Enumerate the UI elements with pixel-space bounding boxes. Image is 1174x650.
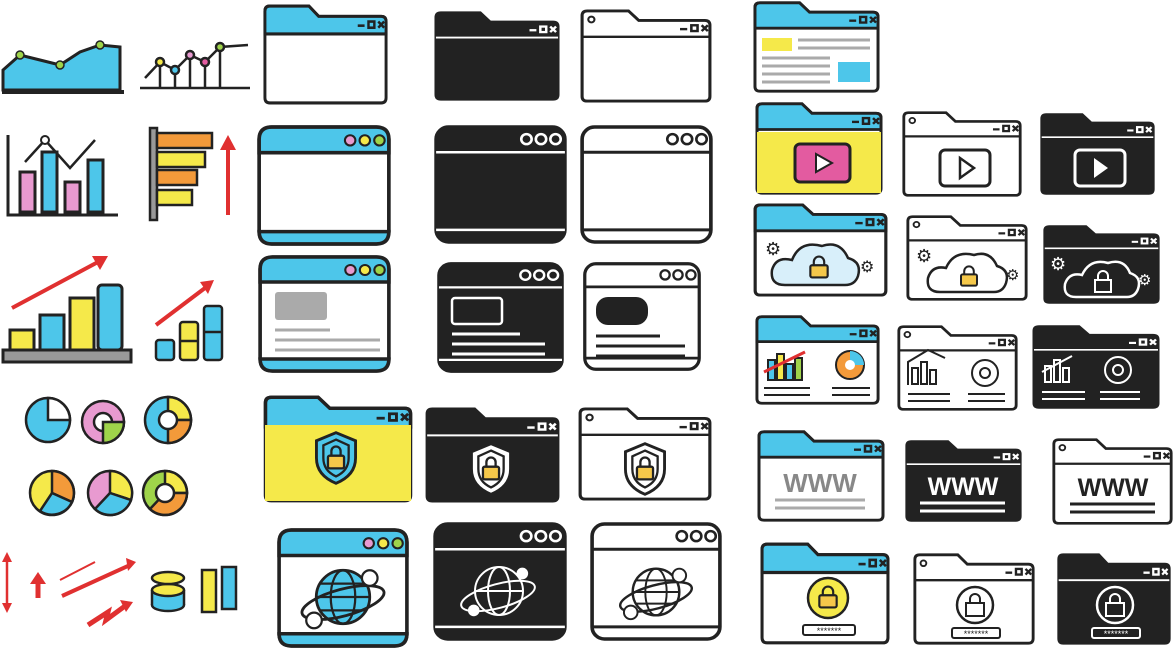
analytics window blue [757,317,878,403]
chart: rising bars with arrow [3,256,131,362]
cloud lock window blue: ⚙ [765,239,781,260]
video window white [904,113,1020,195]
video window blue [757,104,881,193]
chart: line with dots [140,43,250,88]
window row4 shield white [580,409,710,499]
www window white: WWW [1078,474,1149,502]
window row3 black with content [439,264,562,371]
window row2 black [436,127,565,242]
window row3 blue with content [260,257,389,371]
cloud lock window black: ⚙ [1138,271,1151,289]
window row5 globe blue [279,530,407,646]
www window blue: WWW [783,468,857,498]
lock window blue: ******* [817,626,842,636]
lock window white: ******* [964,629,989,639]
cloud lock window blue [755,205,886,295]
window row2 blue [259,127,389,244]
window row5 globe black [435,524,565,639]
cloud lock window blue: ⚙ [860,257,874,276]
chart: bar with line [8,135,118,215]
lock window white [915,555,1033,643]
window row1 blue [265,6,386,103]
chart: small bars [156,280,222,360]
analytics window black [1034,327,1158,407]
chart: area [2,41,124,92]
window row3 white with content [585,264,699,369]
www window white [1054,440,1171,523]
www window black: WWW [928,473,999,501]
window row2 white [582,127,711,242]
web page [755,3,878,91]
lock window black: ******* [1104,629,1129,639]
www window black [907,442,1020,520]
pie charts [26,397,191,515]
arrows and cylinders [2,552,236,625]
www window blue [759,432,883,520]
lock window blue [762,544,888,643]
window row1 black [436,13,558,99]
video window black [1042,115,1153,193]
window row5 globe white [592,524,720,639]
cloud lock window white: ⚙ [916,246,932,267]
chart: horizontal bars [150,128,236,220]
window row4 shield blue [265,397,411,501]
cloud lock window black [1045,226,1158,303]
cloud lock window white: ⚙ [1006,266,1019,284]
window row1 white [582,11,710,101]
cloud lock window white [908,217,1026,299]
analytics window white [899,327,1016,409]
window row4 shield black [427,409,558,501]
lock window black [1059,555,1169,643]
cloud lock window black: ⚙ [1050,254,1066,275]
